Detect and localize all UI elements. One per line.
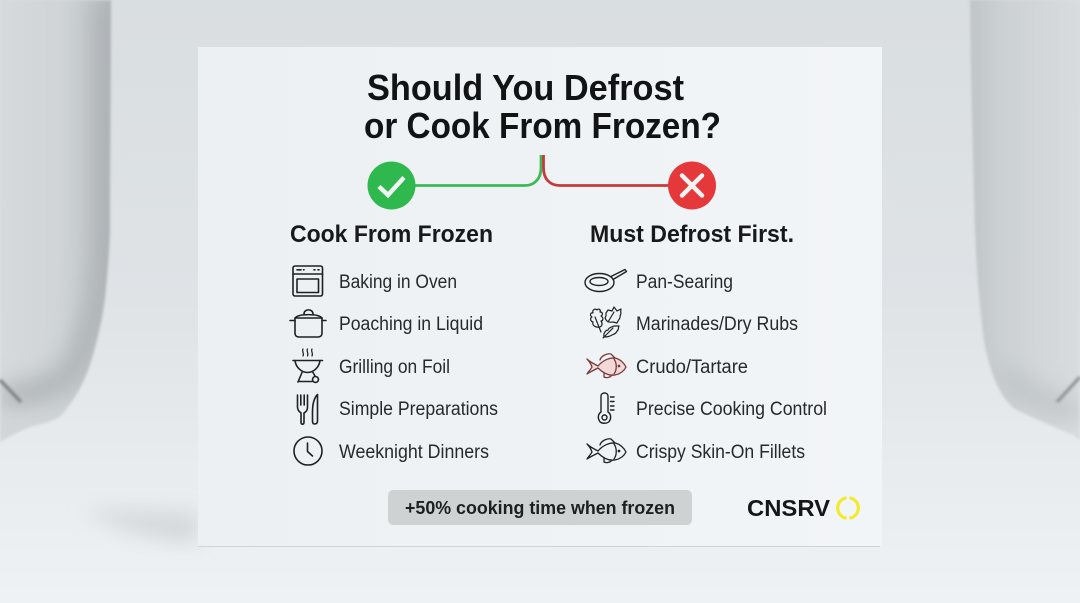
icon: green check xyxy=(368,162,416,210)
text: grilling on foil: Grilling on Foil xyxy=(339,357,450,378)
icon: fish outline xyxy=(587,439,626,463)
text: baking in oven: Baking in Oven xyxy=(339,272,457,293)
heading: must defrost first: Must Defrost First. xyxy=(590,221,794,248)
title: or Cook From Frozen? xyxy=(364,105,721,146)
icon: pan xyxy=(585,270,626,292)
list: must defrost first xyxy=(585,270,827,463)
text: simple preparations: Simple Preparations xyxy=(339,399,498,420)
icon: red cross xyxy=(668,162,716,210)
callout: cooking time: +50% cooking time when frozen xyxy=(405,497,675,518)
heading: cook from frozen: Cook From Frozen xyxy=(290,221,493,248)
text: precise cooking control: Precise Cooking Control xyxy=(636,399,827,420)
connector: decision fork xyxy=(414,155,670,186)
panel: card xyxy=(198,47,882,547)
icon: pink fish xyxy=(587,354,626,378)
text: crispy skin-on fillets: Crispy Skin-On Fillets xyxy=(636,442,805,463)
logo: CNSRV: CNSRV xyxy=(747,495,831,521)
list: cook from frozen xyxy=(290,266,498,465)
text: poaching in liquid: Poaching in Liquid xyxy=(339,314,483,335)
title: Should You Defrost xyxy=(367,67,684,108)
icon: thermometer xyxy=(598,393,614,423)
text: marinades/dry rubs: Marinades/Dry Rubs xyxy=(636,314,798,335)
icon: fork and knife xyxy=(298,394,318,424)
text: weeknight dinners: Weeknight Dinners xyxy=(339,442,489,463)
text: pan-searing: Pan-Searing xyxy=(636,272,733,293)
icon: grill xyxy=(293,349,322,382)
title xyxy=(364,67,721,146)
icon: clock xyxy=(294,437,322,465)
icon: oven xyxy=(293,266,322,296)
callout: cooking time xyxy=(388,490,692,525)
icon: herbs xyxy=(590,307,621,338)
icon: pot xyxy=(290,310,326,337)
text: crudo/tartare: Crudo/Tartare xyxy=(636,357,748,378)
